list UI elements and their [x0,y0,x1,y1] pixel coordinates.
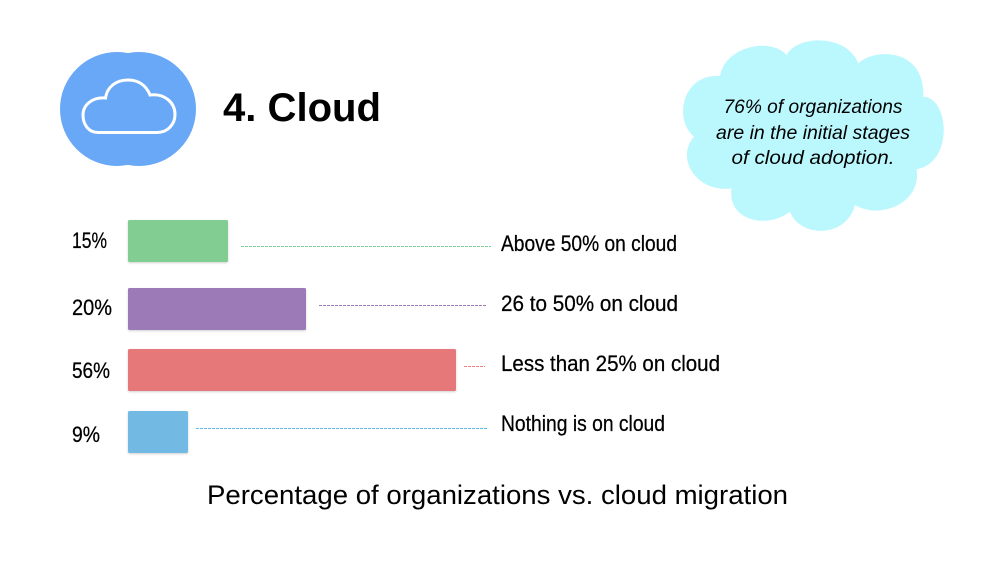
leader line [196,428,487,430]
callout: cloud adoption [683,40,944,231]
leader line [464,366,485,368]
caption: Percentage of organizations vs. cloud migration [207,480,788,510]
label: Less than 25% on cloud [501,351,720,376]
callout: cloud adoption: 76% of organizations [724,97,903,118]
label: 26 to 50% on cloud [501,291,678,316]
callout: cloud adoption: are in the initial stages [716,123,911,144]
bar 15% [128,220,228,262]
title: 4. Cloud [223,86,381,130]
row: less than 25% on cloud [72,349,720,391]
bar 9% [128,411,188,453]
value 9%: 9% [72,422,100,447]
label: Above 50% on cloud [501,231,677,256]
row: 26 to 50% on cloud [72,288,678,330]
label: Nothing is on cloud [501,411,665,436]
leader line [319,304,487,306]
value 20%: 20% [72,295,112,320]
leader line [241,246,491,248]
callout: cloud adoption: of cloud adoption. [732,148,894,169]
icon: cloud badge [60,52,196,166]
bar 56% [128,349,456,391]
value 15%: 15% [72,228,107,253]
row: above 50% on cloud [72,220,677,262]
bar 20% [128,288,306,330]
row: nothing is on cloud [72,411,665,453]
value 56%: 56% [72,358,110,383]
